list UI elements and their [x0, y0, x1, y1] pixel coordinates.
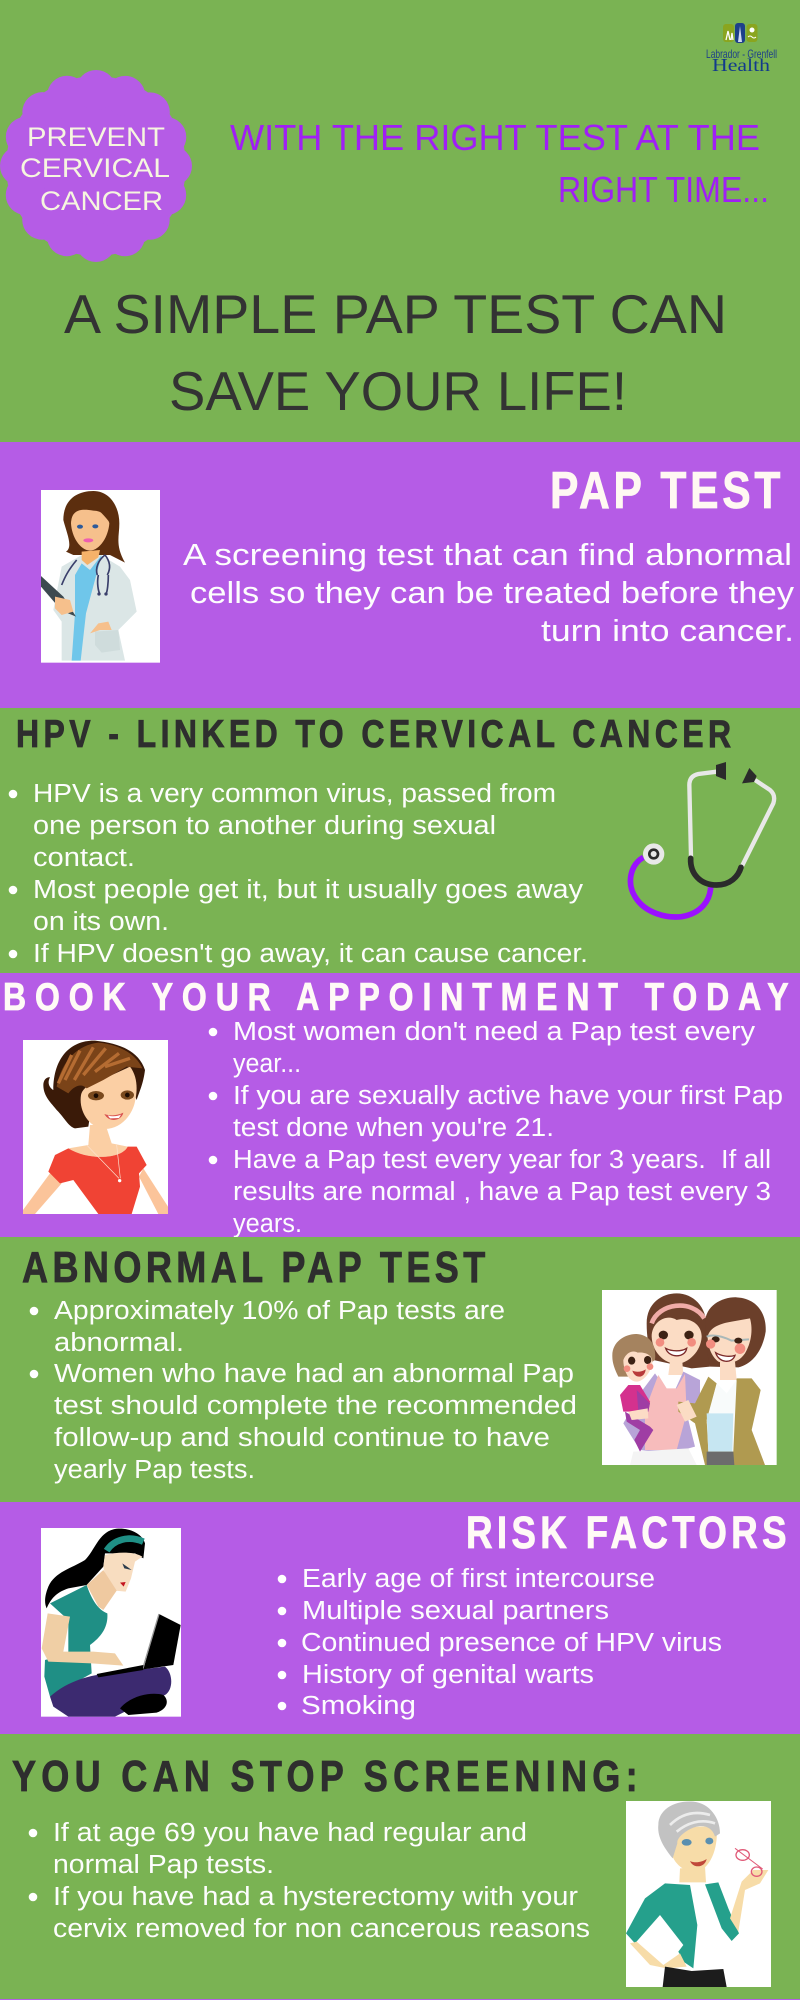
bullet: age 69: If at age 69 you have had regular and [53, 1819, 527, 1847]
bullet: common virus: HPV is a very common virus, passed from [33, 780, 556, 808]
bullet: genital warts: History of genital warts [302, 1661, 594, 1689]
bullet: hysterectomy [29, 1883, 590, 1943]
bullet: ten percent [30, 1297, 505, 1357]
panel: abnormal pap test [0, 1237, 800, 1502]
bullet: partners: Multiple sexual partners [302, 1597, 609, 1625]
bullet: follow-up: follow-up and should continue to have [54, 1424, 550, 1452]
title: SAVE YOUR LIFE! [169, 360, 627, 422]
bullet: hysterectomy: cervix removed for non cancerous reasons [53, 1915, 590, 1943]
bullet: early age: Early age of first intercourse [302, 1565, 655, 1593]
description: A screening test that can find abnormal [183, 537, 792, 572]
bullet: common virus [9, 780, 556, 872]
bullet: goes away [9, 876, 583, 936]
badge: prevent cervical cancer: PREVENT [27, 122, 165, 152]
badge: prevent cervical cancer: CANCER [40, 186, 163, 216]
bullet: every 3 years: years. [233, 1210, 302, 1238]
appointment background [0, 973, 800, 1237]
panel: hpv [0, 708, 800, 973]
bullet: first pap test: If you are sexually active have your first Pap [233, 1082, 783, 1110]
heading: pap test: PAP TEST [550, 462, 780, 520]
header background [0, 0, 800, 442]
bottom edge [0, 1999, 800, 2000]
bullet: not every year: year... [233, 1050, 301, 1078]
panel: risk factors [0, 1502, 800, 1734]
abnormal list [30, 1297, 577, 1484]
stop screening background [0, 1734, 800, 1999]
bullet: not every year [209, 1018, 755, 1078]
heading: stop screening: YOU CAN STOP SCREENING: [12, 1752, 638, 1801]
bullet: hpv virus: Continued presence of HPV virus [301, 1629, 722, 1657]
bullet: follow-up: yearly Pap tests. [54, 1456, 255, 1484]
title: A SIMPLE PAP TEST CAN [64, 283, 727, 345]
icon: older woman [626, 1801, 771, 1987]
bullet: first pap test [209, 1082, 783, 1142]
panel: stop screening [0, 1734, 800, 1999]
appointment list [209, 1018, 783, 1238]
tagline [230, 117, 769, 210]
tagline: RIGHT TIME... [558, 169, 769, 210]
bullet: ten percent: abnormal. [54, 1329, 184, 1357]
bullet: age 69: normal Pap tests. [53, 1851, 274, 1879]
bullet: goes away: on its own. [33, 908, 169, 936]
icon: woman with laptop [41, 1528, 181, 1717]
logo: Labrador-Grenfell Health [706, 23, 777, 75]
bullet: common virus: contact. [33, 844, 135, 872]
panel: header [0, 0, 800, 442]
abnormal background [0, 1237, 800, 1502]
panel: book your appointment [0, 973, 800, 1238]
icon: stethoscope [630, 762, 774, 917]
bullet: every 3 years: Have a Pap test every year for 3 years. If all [233, 1146, 771, 1174]
bullet: follow-up: test should complete the recommended [54, 1392, 577, 1420]
bullet: smoking: Smoking [301, 1692, 416, 1720]
badge: prevent cervical cancer [6, 76, 186, 256]
title [64, 283, 727, 422]
hpv background [0, 708, 800, 973]
icon: doctor [41, 490, 160, 663]
tagline: WITH THE RIGHT TEST AT THE [230, 117, 760, 158]
bullet: follow-up: Women who have had an abnormal Pap [54, 1360, 574, 1388]
bullet: age 69 [29, 1819, 527, 1879]
bullet: every 3 years: results are normal , have a Pap test every 3 [233, 1178, 771, 1206]
icon: family [602, 1290, 777, 1465]
bullet: hysterectomy: If you have had a hysterectomy with your [53, 1883, 579, 1911]
logo: Labrador-Grenfell Health: Health [712, 55, 770, 75]
bullet: ten percent: Approximately 10% of Pap tests are [54, 1297, 505, 1325]
bullet: goes away: Most people get it, but it usually goes away [33, 876, 583, 904]
pap test background [0, 442, 800, 708]
heading: abnormal pap test: ABNORMAL PAP TEST [22, 1243, 486, 1292]
description: turn into cancer. [541, 613, 794, 648]
hpv list [9, 780, 588, 968]
bullet: every 3 years [209, 1146, 771, 1238]
stop screening list [29, 1819, 590, 1943]
heading: risk factors: RISK FACTORS [466, 1508, 787, 1558]
description: cells so they can be treated before they [190, 575, 795, 610]
risk list [278, 1565, 722, 1720]
heading: book your appointment: BOOK YOUR APPOINTMENT TODAY [3, 975, 789, 1019]
bullet: follow-up [30, 1360, 577, 1484]
icon: woman with red top [23, 1040, 168, 1214]
heading: hpv: HPV - LINKED TO CERVICAL CANCER [16, 712, 731, 756]
bullet: first pap test: test done when you're 21. [233, 1114, 554, 1142]
bullet: not every year: Most women don't need a Pap test every [233, 1018, 755, 1046]
description [183, 537, 795, 648]
risk factors background [0, 1502, 800, 1734]
bullet: common virus: one person to another during sexual [33, 812, 496, 840]
panel: pap test [0, 442, 800, 708]
bullet: can cause cancer: If HPV doesn't go away, it can cause cancer. [33, 940, 588, 968]
badge: prevent cervical cancer: CERVICAL [20, 153, 170, 183]
